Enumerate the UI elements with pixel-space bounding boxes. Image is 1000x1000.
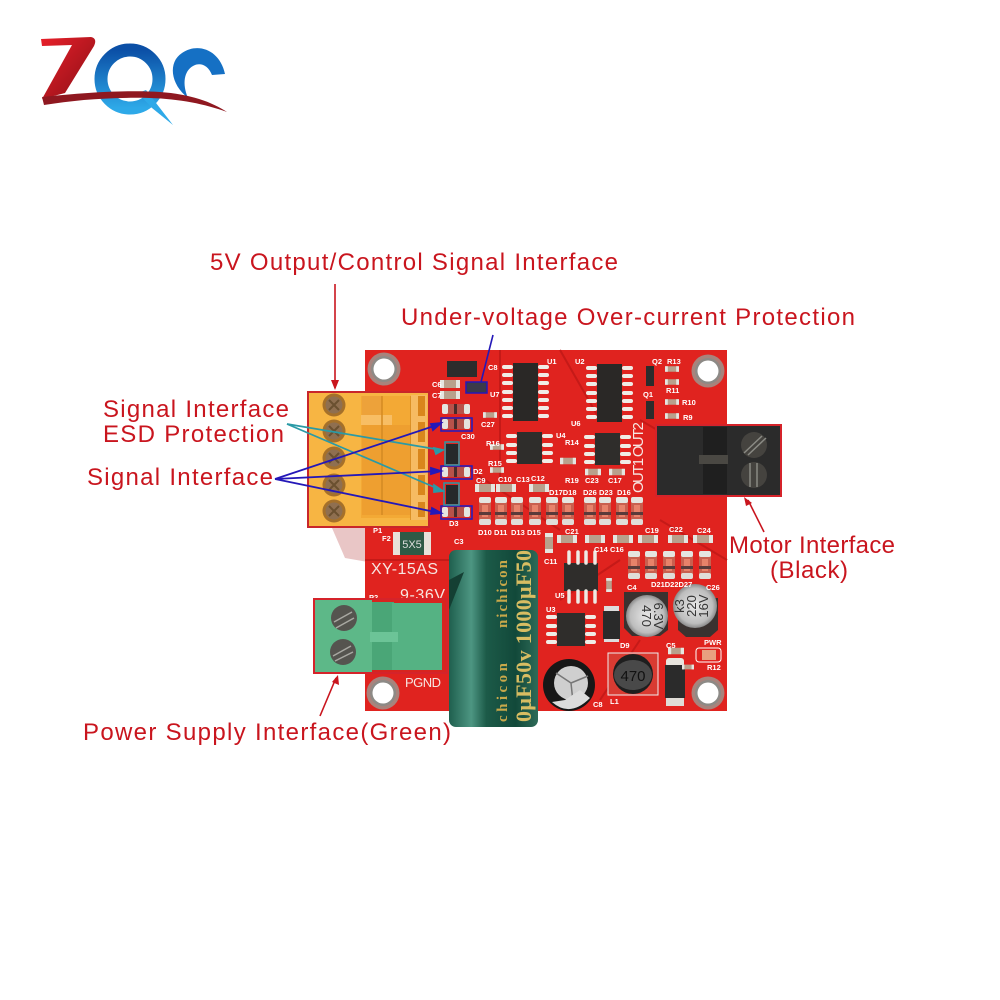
board silkscreen labels: OUT1 OUT2 — [630, 422, 647, 493]
board silkscreen labels: D10 — [478, 528, 492, 537]
board silkscreen labels: C12 — [531, 474, 545, 483]
row of diodes D14 to D28 — [628, 551, 711, 579]
board silkscreen labels: D13 — [511, 528, 525, 537]
board silkscreen labels: C6 — [432, 380, 442, 389]
chip U4 — [506, 432, 553, 464]
board silkscreen labels: C11 — [544, 557, 557, 566]
inductor L1 — [608, 653, 658, 695]
large electrolytic capacitor C3: chicon — [495, 662, 511, 722]
board silkscreen labels: U1 — [547, 357, 557, 366]
board silkscreen labels: C7 — [432, 391, 442, 400]
logo letter Q — [101, 50, 173, 125]
board silkscreen labels: C26 — [706, 583, 720, 592]
large electrolytic capacitor C3 — [449, 550, 538, 727]
board silkscreen labels: U2 — [575, 357, 585, 366]
board silkscreen labels: D21D22D27 — [651, 580, 692, 589]
logo swoosh — [42, 91, 227, 112]
callout lines: signal interface — [275, 423, 441, 514]
board silkscreen labels: C13 — [516, 475, 530, 484]
board silkscreen labels: L1 — [610, 697, 619, 706]
board silkscreen labels: Q1 — [643, 390, 653, 399]
label: power supply: Power Supply Interface(Green) — [83, 719, 451, 746]
board silkscreen labels: C19 — [645, 526, 659, 535]
green power connector — [314, 599, 447, 673]
board silkscreen labels — [369, 357, 722, 709]
board silkscreen labels: R10 — [682, 398, 696, 407]
board silkscreen labels: C14 — [594, 545, 609, 554]
board silkscreen labels: D16 — [617, 488, 631, 497]
label: motor interface: Motor Interface — [729, 532, 895, 559]
orange 5V / control signal connector — [308, 392, 429, 527]
board silkscreen labels: U7 — [490, 390, 500, 399]
black motor connector — [656, 425, 781, 496]
board silkscreen labels: D11 — [494, 528, 507, 537]
logo: ZQC — [41, 37, 227, 125]
large electrolytic capacitor C3: 0μF50v 1000μF50 — [511, 550, 536, 722]
callout arrow: 5V output — [331, 284, 339, 390]
board silkscreen labels: C4 — [627, 583, 637, 592]
fuse F2: 5X5 — [402, 539, 422, 551]
board silkscreen labels: R12 — [707, 663, 721, 672]
label: motor interface — [729, 532, 895, 584]
board silkscreen labels: R11 — [666, 386, 679, 395]
board silkscreen labels: C3 — [454, 537, 464, 546]
capacitor C26: 220 — [684, 595, 699, 617]
chip U3 — [546, 613, 596, 646]
board silkscreen labels: P2 — [369, 593, 378, 602]
large electrolytic capacitor C3: nichicon — [495, 559, 511, 628]
label: under-voltage: Under-voltage Over-current Protection — [401, 304, 855, 331]
board silkscreen labels: D3 — [449, 519, 459, 528]
small capacitors — [440, 380, 713, 669]
capacitor C4: 6.3V — [651, 603, 666, 630]
callout lines: ESD protection — [287, 424, 443, 492]
row of diodes D10 to D12 — [479, 497, 643, 525]
board silkscreen labels: C22 — [669, 525, 683, 534]
capacitor C4: 470 — [639, 605, 654, 627]
board silkscreen labels: D17D18 — [549, 488, 577, 497]
capacitor C26: 16V — [696, 594, 711, 618]
board silkscreen labels: C9 — [476, 476, 486, 485]
callout arrow: under-voltage — [481, 335, 493, 382]
board silkscreen labels: C17 — [608, 476, 622, 485]
board silkscreen labels: R19 — [565, 476, 579, 485]
capacitor C26 — [672, 584, 718, 637]
ESD protection chips — [446, 444, 458, 504]
board silkscreen labels: C5 — [666, 641, 676, 650]
board silkscreen labels: U3 — [546, 605, 556, 614]
board silkscreen labels: U5 — [555, 591, 565, 600]
board silkscreen labels: C27 — [481, 420, 495, 429]
motor terminal screws — [741, 432, 767, 488]
panel: red circuit board — [365, 350, 727, 711]
board silkscreen labels: C10 — [498, 475, 512, 484]
board silkscreen labels: R15 — [488, 459, 502, 468]
label: signal interface ESD protection: ESD Protection — [103, 421, 284, 448]
board silkscreen labels: R13 — [667, 357, 681, 366]
board silkscreen labels: D15 — [527, 528, 541, 537]
fuse F2 — [393, 532, 431, 555]
label: signal interface ESD protection: Signal Interface — [103, 396, 289, 423]
board silkscreen labels: F2 — [382, 534, 391, 543]
mounting holes — [366, 352, 724, 710]
board silkscreen labels: C8 — [593, 700, 603, 709]
capacitor C26: k3 — [672, 599, 687, 613]
diode D7 — [665, 658, 685, 706]
board silkscreen labels: R14 — [565, 438, 580, 447]
board silkscreen labels: XY-15AS — [371, 561, 438, 578]
chip U6 — [584, 433, 631, 465]
boxes: ESD highlights — [444, 442, 459, 505]
resistors R9 to R13 — [665, 366, 679, 419]
boxes: signal diode highlights — [441, 418, 472, 519]
capacitor C8 — [543, 659, 595, 711]
board silkscreen labels: PGND — [405, 675, 441, 690]
logo letter Z — [41, 37, 95, 99]
board silkscreen labels: D9 — [620, 641, 630, 650]
callout arrow: motor — [744, 497, 764, 532]
board silkscreen labels: C21 — [565, 527, 579, 536]
watermark shadow — [332, 528, 398, 562]
label: signal interface ESD protection — [103, 396, 289, 448]
label: motor interface: (Black) — [770, 557, 848, 584]
chip U2 — [586, 364, 633, 422]
label: signal interface: Signal Interface — [87, 464, 273, 491]
transistors Q1 Q2 — [646, 366, 654, 419]
board silkscreen labels: D2 — [473, 467, 483, 476]
board silkscreen labels: D26 — [583, 488, 597, 497]
board silkscreen labels: U4 — [556, 431, 566, 440]
board silkscreen labels: 9-36V — [400, 587, 445, 604]
power terminal screws — [330, 605, 357, 665]
board silkscreen labels: C8 — [488, 363, 498, 372]
board silkscreen labels: C23 — [585, 476, 599, 485]
inductor L1: 470 — [620, 668, 646, 685]
callout arrow: power — [320, 675, 339, 716]
board silkscreen labels: U6 — [571, 419, 581, 428]
LED PWR — [696, 648, 721, 662]
board silkscreen labels: P1 — [373, 526, 382, 535]
board silkscreen labels: C16 — [610, 545, 624, 554]
board silkscreen labels: C30 — [461, 432, 475, 441]
board silkscreen labels: PWR — [704, 638, 722, 647]
capacitor C4 — [624, 592, 668, 637]
board silkscreen labels: D23 — [599, 488, 613, 497]
terminal screws — [322, 394, 346, 522]
diode D8 — [447, 361, 477, 377]
label: 5V output: 5V Output/Control Signal Interface — [210, 249, 618, 276]
board silkscreen labels: R16 — [486, 439, 500, 448]
diode D9 — [603, 606, 620, 642]
chip U1 — [502, 363, 549, 421]
box: U7 highlight — [466, 382, 487, 393]
board silkscreen labels: R9 — [683, 413, 693, 422]
board silkscreen labels: C24 — [697, 526, 712, 535]
board silkscreen labels: Q2 — [652, 357, 662, 366]
chip U5 — [564, 552, 598, 602]
signal diodes — [442, 404, 470, 517]
logo letter C — [173, 48, 225, 98]
